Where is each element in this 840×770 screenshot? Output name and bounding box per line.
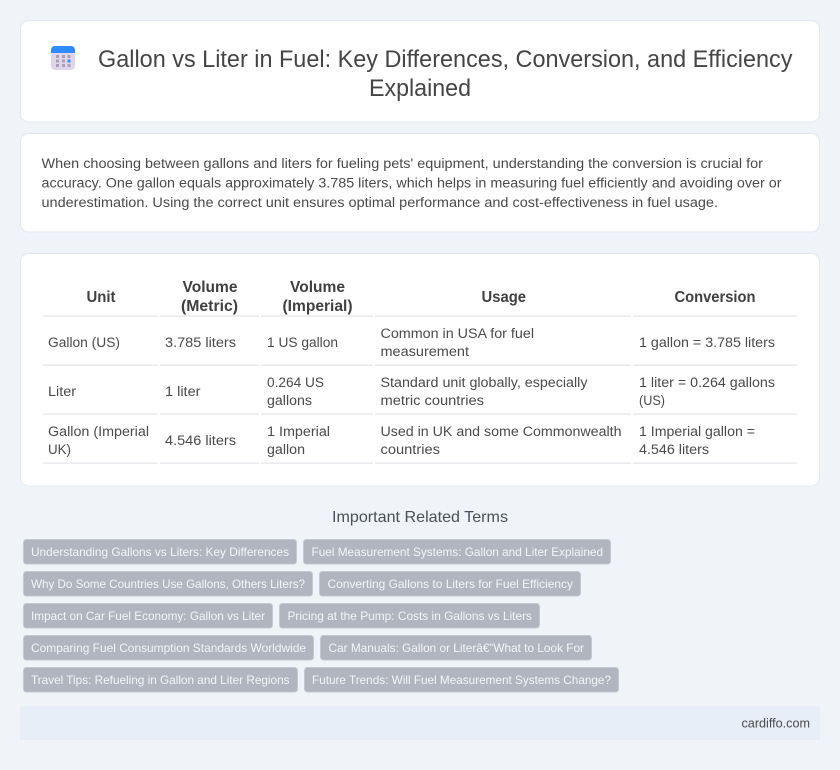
title: Gallon vs Liter in Fuel: Key Differences, Conversion, and Efficiency <box>98 46 792 73</box>
table row: gallon US <box>48 326 775 360</box>
table header row: Unit <box>86 289 116 306</box>
panel: intro paragraph <box>20 134 820 232</box>
title <box>98 46 792 102</box>
panel: comparison table <box>20 254 820 486</box>
table row: gallon US: measurement <box>380 344 469 360</box>
table row: liter: 1 liter <box>165 384 201 400</box>
heading: related terms: Important Related Terms <box>332 509 508 526</box>
table row: gallon imperial: UK) <box>48 442 71 458</box>
table header row: Conversion <box>674 289 756 306</box>
table row: liter: metric countries <box>380 393 484 409</box>
panel: related term tags: Travel Tips: Refueling in Gallon and Liter Regions <box>31 673 290 687</box>
table row: liter: Standard unit globally, especially <box>380 375 588 391</box>
table row: gallon imperial: 1 Imperial <box>267 424 330 440</box>
panel: related term tags: Impact on Car Fuel Economy: Gallon vs Liter <box>31 609 265 623</box>
title: Explained <box>369 75 471 102</box>
table row: gallon imperial: 4.546 liters <box>639 442 709 458</box>
table row: gallon US: Gallon (US) <box>48 335 120 351</box>
table row: liter <box>48 375 775 409</box>
panel: related term tags: Comparing Fuel Consumption Standards Worldwide <box>31 641 306 655</box>
table row: gallon imperial: Gallon (Imperial <box>48 424 149 440</box>
table row: gallon imperial: gallon <box>267 442 305 458</box>
table row: gallon US: 3.785 liters <box>165 335 236 351</box>
panel: related term tags: Pricing at the Pump: Costs in Gallons vs Liters <box>288 609 532 623</box>
table header row: (Imperial) <box>282 298 352 315</box>
table row: gallon US: 1 US gallon <box>267 335 338 351</box>
panel: related term tags: Car Manuals: Gallon or Literâ€”What to Look For <box>328 641 584 655</box>
panel: related term tags: Future Trends: Will Fuel Measurement Systems Change? <box>312 673 611 687</box>
table row: liter: (US) <box>639 393 665 409</box>
table row: gallon US: 1 gallon = 3.785 liters <box>639 335 775 351</box>
table header row: (Metric) <box>181 298 238 315</box>
table header row: Volume <box>290 279 345 296</box>
table row: gallon imperial <box>48 424 755 458</box>
table row: liter: 1 liter = 0.264 gallons <box>639 375 775 391</box>
panel: related term tags <box>24 540 618 692</box>
panel: related term tags: Converting Gallons to Liters for Fuel Efficiency <box>328 577 573 591</box>
table header row <box>86 279 756 315</box>
footer bar: cardiffo.com <box>742 716 810 730</box>
table row: gallon imperial: 4.546 liters <box>165 433 236 449</box>
footer bar <box>20 706 820 740</box>
intro text: accuracy. One gallon equals approximately 3.785 liters, which helps in measuring fuel efficiently and avoiding over or <box>42 176 782 192</box>
panel: related term tags: Why Do Some Countries Use Gallons, Others Liters? <box>31 577 305 591</box>
table row: liter: Liter <box>48 384 76 400</box>
table header row: Usage <box>482 289 526 306</box>
intro text: When choosing between gallons and liters for fueling pets' equipment, understanding the conversion is crucial for <box>42 156 763 172</box>
table header row: Volume <box>182 279 238 296</box>
intro text <box>42 156 782 211</box>
table row: gallon imperial: 1 Imperial gallon = <box>639 424 755 440</box>
panel: header card <box>20 20 820 122</box>
table row: gallon imperial: countries <box>380 442 440 458</box>
icon: calendar <box>51 46 75 70</box>
table row: liter: 0.264 US <box>267 375 324 391</box>
table row: liter: gallons <box>267 393 312 409</box>
panel: related term tags: Fuel Measurement Systems: Gallon and Liter Explained <box>312 545 603 559</box>
table row: gallon imperial: Used in UK and some Commonwealth <box>380 424 622 440</box>
intro text: underestimation. Using the correct unit ensures optimal performance and cost-effectiveness in fuel usage. <box>42 195 718 211</box>
panel: related term tags: Understanding Gallons vs Liters: Key Differences <box>31 545 289 559</box>
table row: gallon US: Common in USA for fuel <box>380 326 534 342</box>
